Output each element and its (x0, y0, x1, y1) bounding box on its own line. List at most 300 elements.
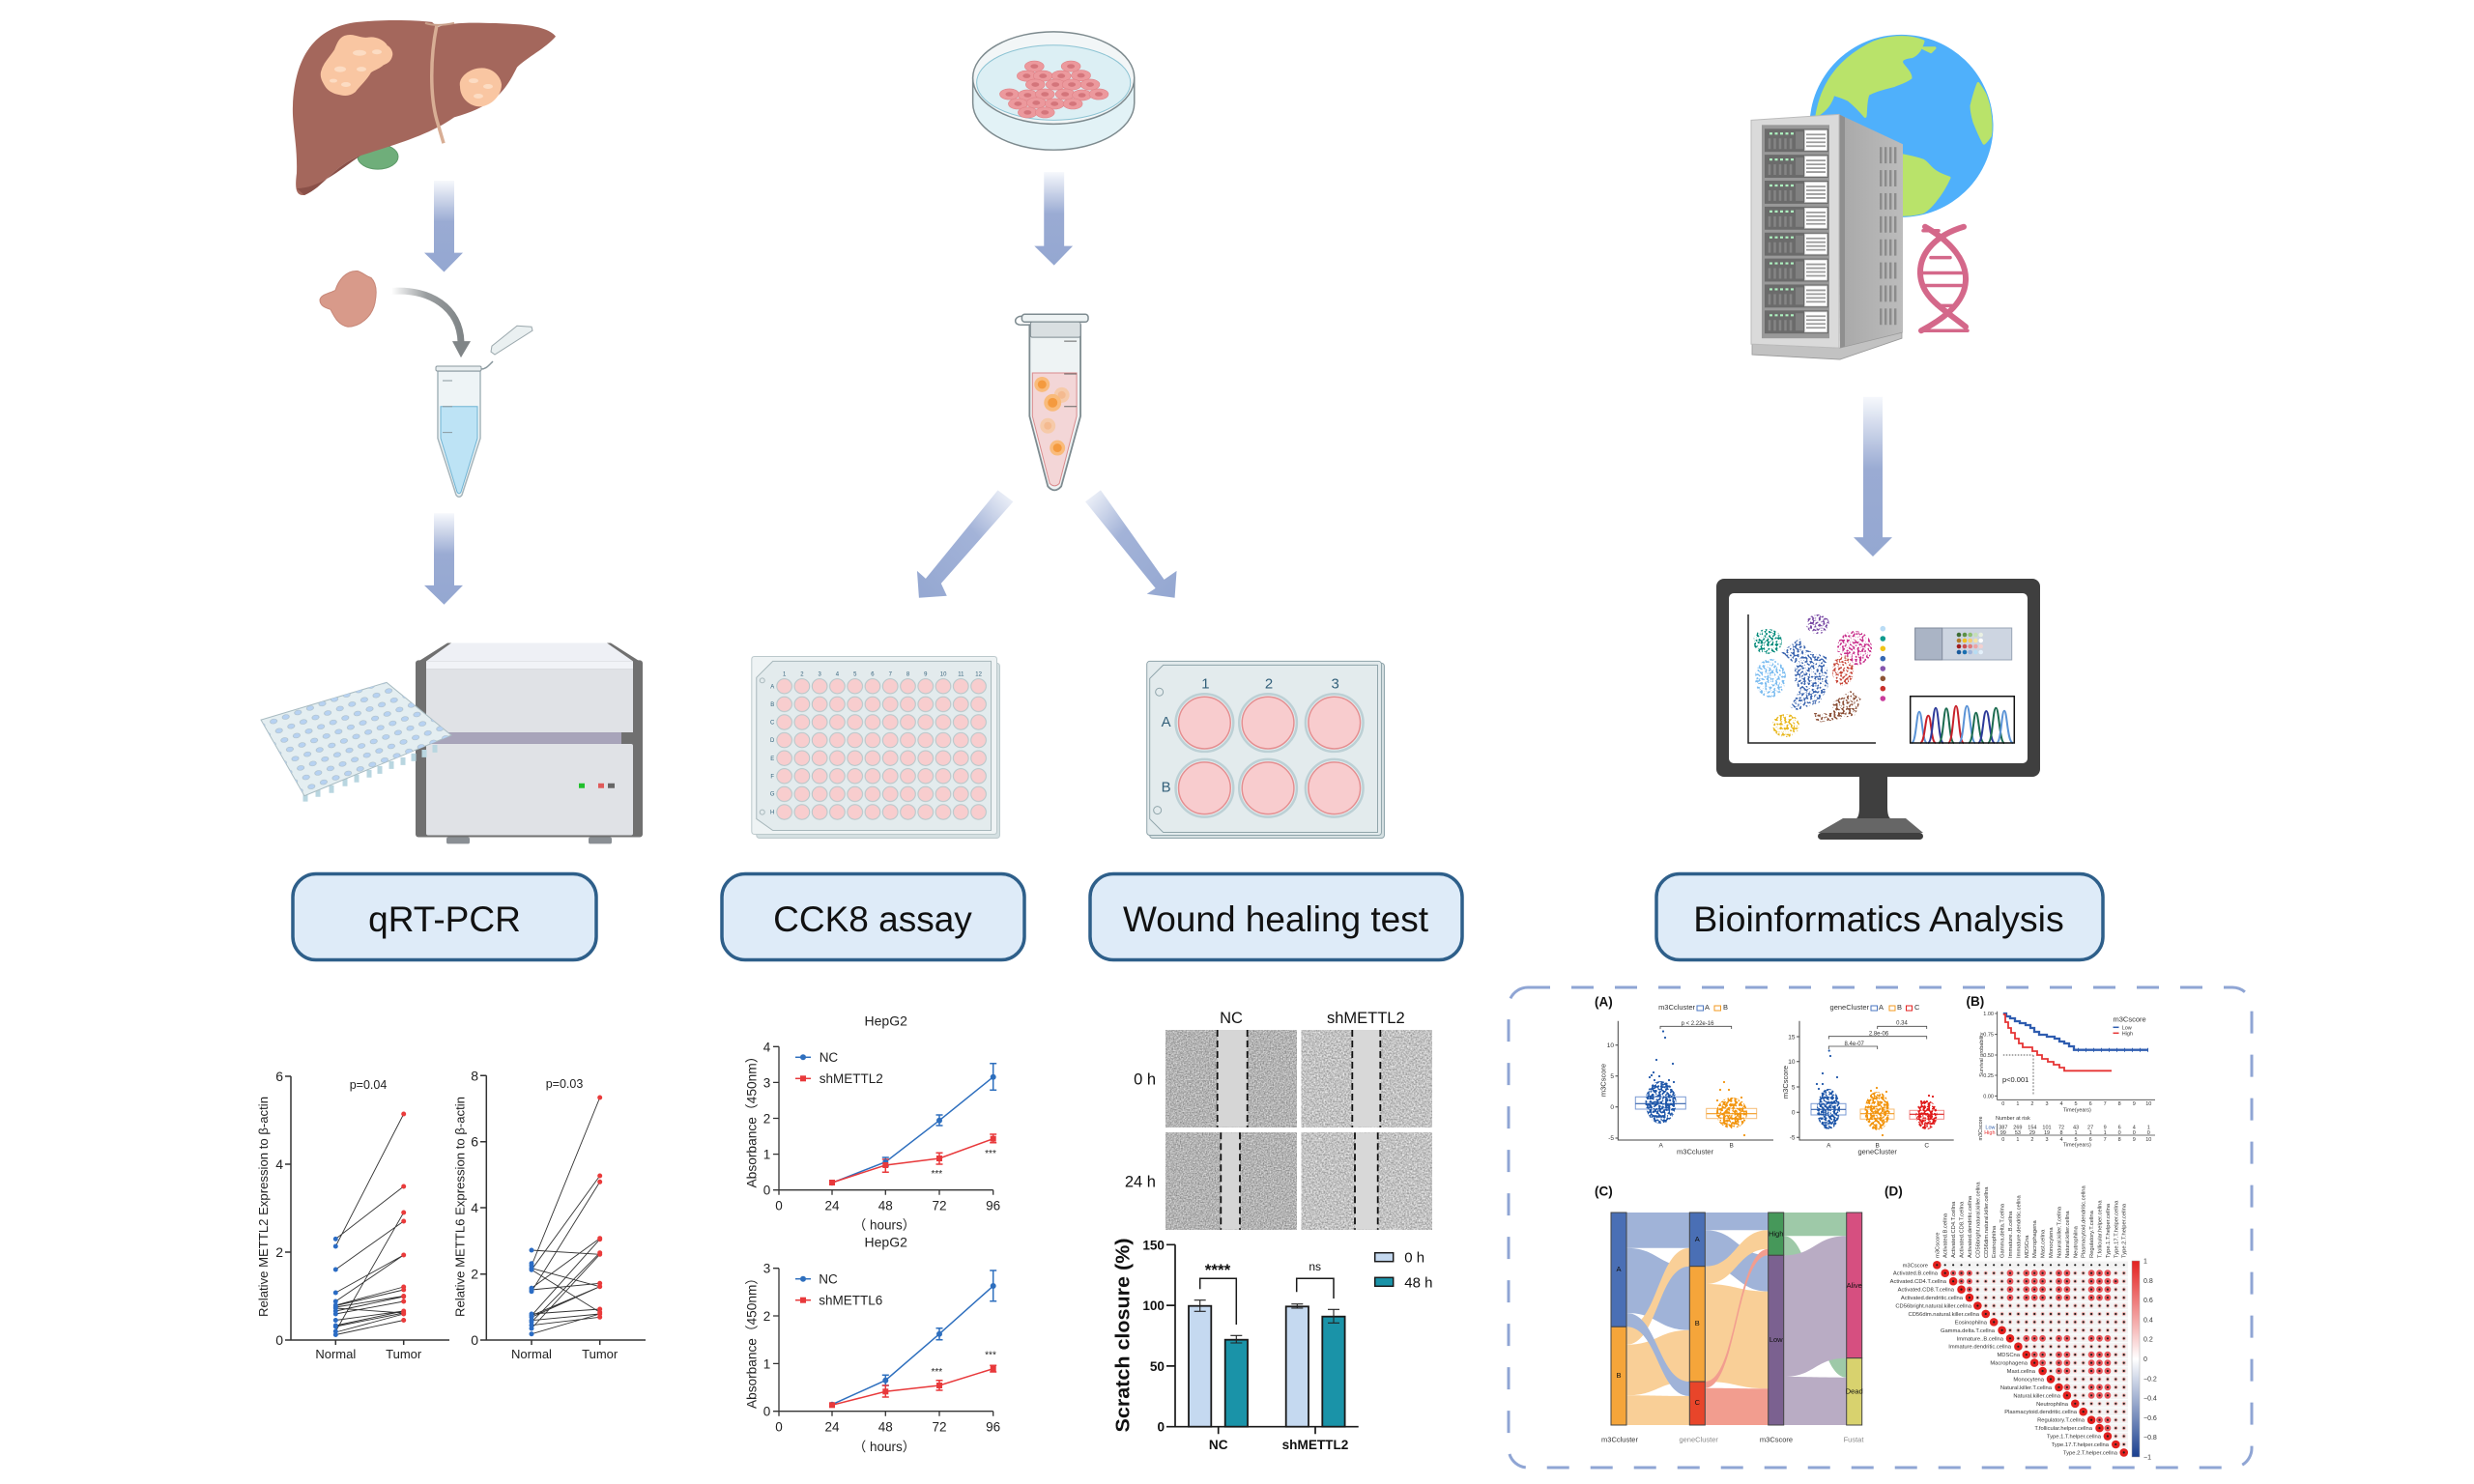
chart: survival curves: 0.00 (1983, 1094, 1994, 1099)
chart: sankey alluvial diagram (1595, 1184, 1864, 1444)
icon: 96-well CCK8 plate: 5 (853, 671, 857, 677)
colour scale legend: 0.2 (2143, 1337, 2153, 1344)
table: number at risk: 29 (2029, 1130, 2035, 1136)
chart: tSNE cluster scatter (1748, 614, 1885, 743)
chart: METTL2 paired expression: Relative METTL2 Expression to β-actin (256, 1097, 271, 1317)
icon: six-well plate: A (1162, 714, 1171, 730)
chart: METTL6 paired expression: 4 (471, 1200, 478, 1215)
chart: survival curves: 0 (2001, 1101, 2004, 1107)
matrix row labels: Monocytena (2013, 1378, 2045, 1384)
table: number at risk: 5 (2074, 1137, 2078, 1143)
matrix row labels: Mast.cellna (2007, 1369, 2036, 1375)
chart: CCK8 shMETTL2 growth curve: NC (820, 1050, 838, 1065)
colour scale legend: −0.4 (2143, 1396, 2157, 1403)
table: number at risk: 9 (2133, 1137, 2136, 1143)
chart: CCK8 shMETTL6 growth curve: 0 (763, 1405, 770, 1419)
chart: scratch closure bars: shMETTL2 (1282, 1438, 1349, 1452)
chart: m3Cscore boxplot by m3Ccluster: (A) (1595, 995, 1613, 1010)
icon: 96-well CCK8 plate (752, 656, 999, 838)
figure: wound healing micrographs: 0 h (1134, 1071, 1156, 1089)
chart: scratch closure bars: 50 (1150, 1359, 1165, 1374)
matrix column labels: Activated.CD4.T.cellna (1951, 1201, 1957, 1258)
chart: CCK8 shMETTL6 growth curve: 0 (775, 1420, 783, 1435)
chart: CCK8 shMETTL6 growth curve: 3 (763, 1262, 770, 1276)
chart: CCK8 shMETTL6 growth curve: HepG2 (865, 1235, 907, 1250)
chart: m3Cscore boxplot by m3Ccluster: A (1659, 1142, 1664, 1149)
chart: m3Cscore boxplot by geneCluster: geneCluster (1830, 1003, 1869, 1012)
matrix column labels: Gamma.delta.T.cellna (2000, 1203, 2006, 1258)
label: qRT-PCR: qRT-PCR (368, 899, 521, 939)
chart: sankey alluvial diagram: geneCluster (1679, 1436, 1718, 1444)
table: number at risk: 1 (2089, 1130, 2092, 1136)
matrix column labels: m3Cscore (1935, 1233, 1941, 1258)
panel: bioinformatics results dashed frame (1509, 987, 2252, 1468)
chart: m3Cscore boxplot by m3Ccluster: m3Ccluster (1658, 1003, 1695, 1012)
chart: CCK8 shMETTL2 growth curve: *** (985, 1149, 996, 1159)
chart: scratch closure bars: NC (1209, 1438, 1228, 1452)
matrix diagonal (1937, 1265, 2124, 1453)
chart: m3Cscore boxplot by m3Ccluster: B (1730, 1142, 1734, 1149)
matrix column labels: CD56bright.natural.killer.cellna (1975, 1182, 1981, 1258)
table: number at risk: 7 (2104, 1137, 2107, 1143)
icon: 96-well CCK8 plate: 7 (889, 671, 893, 677)
chart: immune cell correlation matrix: (D) (1884, 1184, 1903, 1199)
matrix column labels: Regulatory.T.cellna (2089, 1210, 2095, 1258)
chart: sankey alluvial diagram: Alive (1847, 1281, 1862, 1290)
icon: 96-well CCK8 plate: A (770, 684, 774, 690)
table: number at risk: 0 (2147, 1130, 2150, 1136)
table: number at risk: 99 (2000, 1130, 2006, 1136)
chart: survival curves: Low (2122, 1026, 2132, 1032)
arrow: liver to tumour sample (424, 181, 463, 272)
table: number at risk: 1 (2074, 1130, 2078, 1136)
chart: CCK8 shMETTL2 growth curve: shMETTL2 (820, 1071, 883, 1086)
column: database to bioinformatics illustrations (1751, 35, 1996, 556)
table: number at risk: 0 (2118, 1130, 2121, 1136)
chart: m3Cscore boxplot by geneCluster: C (1924, 1142, 1929, 1149)
icon: qPCR machine (416, 643, 643, 843)
matrix column labels: Type.1.T.helper.cellna (2106, 1203, 2112, 1258)
matrix row labels: Plasmacytoid.dendritic.cellna (2004, 1410, 2078, 1415)
icon: globe (1809, 35, 1996, 221)
matrix row labels: Natural.killer.T.cellna (2000, 1385, 2053, 1391)
colour scale legend: 0.6 (2143, 1298, 2153, 1304)
figure: wound healing micrographs: 24 h (1125, 1174, 1156, 1191)
chart: m3Cscore boxplot by geneCluster: 10 (1788, 1059, 1796, 1066)
colour scale legend: −0.2 (2143, 1376, 2157, 1383)
chart: CCK8 shMETTL2 growth curve: 3 (763, 1075, 770, 1090)
matrix row labels: Activated.CD8.T.cellna (1898, 1288, 1955, 1294)
chart: CCK8 shMETTL6 growth curve (745, 1235, 1000, 1454)
chart: sankey alluvial diagram: B (1695, 1319, 1700, 1327)
chart: CCK8 shMETTL2 growth curve: 1 (763, 1148, 770, 1162)
chart: survival curves: 2 (2030, 1101, 2033, 1107)
icon: 96-well CCK8 plate: 10 (940, 671, 947, 677)
chart: m3Cscore boxplot by geneCluster: 0 (1792, 1109, 1796, 1117)
table: number at risk: Number at risk (1996, 1116, 2030, 1122)
chart: survival curves: 7 (2104, 1101, 2107, 1107)
table: number at risk: 8 (2118, 1137, 2121, 1143)
matrix column labels: Natural.killer.cellna (2065, 1211, 2071, 1258)
arrow: dish to tube (1034, 172, 1073, 266)
table: number at risk: 154 (2028, 1125, 2036, 1130)
chart: METTL6 paired expression (453, 1068, 646, 1361)
chart: sankey alluvial diagram: m3Ccluster (1601, 1436, 1638, 1444)
icon: six-well plate: 3 (1332, 675, 1339, 692)
arrow: tissue into tube (391, 291, 471, 357)
table: number at risk: 6 (2089, 1137, 2092, 1143)
matrix column labels (1935, 1182, 2128, 1258)
chart: CCK8 shMETTL2 growth curve: 96 (986, 1199, 1000, 1213)
chart: survival curves: 4 (2059, 1101, 2063, 1107)
chart: survival curves: 3 (2045, 1101, 2049, 1107)
matrix column labels: Activated.dendritic.cellna (1968, 1195, 1973, 1258)
chart: survival curves: m3Cscore (2113, 1015, 2146, 1024)
chart: METTL2 paired expression: 0 (275, 1332, 283, 1348)
chart: sankey alluvial diagram: (C) (1595, 1184, 1613, 1199)
matrix row labels: Neutrophilna (2036, 1402, 2069, 1408)
icon: 96-well CCK8 plate: E (770, 756, 774, 762)
chart: m3Cscore boxplot by m3Ccluster (1595, 995, 1773, 1156)
chart: survival curves: Survival probability (1979, 1032, 1985, 1077)
chart: METTL6 paired expression: Tumor (582, 1347, 618, 1361)
chart: CCK8 shMETTL2 growth curve: 0 (775, 1199, 783, 1213)
label: Wound healing test: Wound healing test (1123, 899, 1429, 939)
matrix column labels: Immature..B.cellna (2008, 1211, 2014, 1258)
icon: tumour tissue piece (320, 271, 376, 327)
chart: m3Cscore boxplot by geneCluster: A (1827, 1142, 1831, 1149)
chart: m3Cscore boxplot by geneCluster (1781, 1003, 1954, 1156)
chart: survival curves: 5 (2074, 1101, 2078, 1107)
matrix column labels: Activated.B.cellna (1943, 1213, 1949, 1258)
matrix row labels: Regulatory.T.cellna (2037, 1418, 2086, 1424)
chart: METTL6 paired expression: Normal (511, 1347, 552, 1361)
icon: server rack (1751, 114, 1903, 359)
icon: 96-well CCK8 plate: G (770, 792, 775, 798)
chart: survival curves: High (2122, 1032, 2133, 1038)
chart: survival curves: (B) (1966, 994, 1984, 1009)
matrix strong correlation dots (2010, 1273, 2116, 1428)
chart: m3Cscore boxplot by geneCluster: geneCluster (1857, 1147, 1897, 1156)
arrow: database to analysis (1854, 397, 1892, 556)
label: CCK8 assay: CCK8 assay (773, 899, 972, 939)
table: number at risk: Time(years) (2063, 1143, 2091, 1149)
icon: computer monitor with single-cell plots (1716, 579, 2040, 840)
matrix row labels: Eosinophilna (1955, 1320, 1988, 1326)
chart: m3Cscore boxplot by m3Ccluster: m3Ccluster (1677, 1147, 1713, 1156)
chart: CCK8 shMETTL2 growth curve: 2 (763, 1111, 770, 1127)
colour scale legend: 0.4 (2143, 1317, 2153, 1324)
chart: METTL6 paired expression: 0 (471, 1332, 478, 1348)
matrix row labels: m3Cscore (1903, 1263, 1928, 1269)
chart: METTL2 paired expression: 4 (275, 1156, 283, 1172)
chart: CCK8 shMETTL2 growth curve: （ hours） (853, 1218, 915, 1233)
chart: sankey alluvial diagram: m3Cscore (1760, 1436, 1793, 1444)
table: number at risk: 387 (1999, 1125, 2007, 1130)
matrix column labels: MDSCna (2025, 1235, 2030, 1258)
table: number at risk: 4 (2059, 1137, 2063, 1143)
colour scale legend: 1 (2143, 1258, 2147, 1266)
chart: METTL2 paired expression (256, 1069, 449, 1361)
chart: survival curves: p<0.001 (2002, 1075, 2028, 1084)
chart: CCK8 shMETTL2 growth curve: 48 (878, 1199, 893, 1213)
chart: METTL2 paired expression: 6 (275, 1069, 283, 1084)
chart: m3Cscore boxplot by geneCluster: C (1914, 1003, 1920, 1012)
icon: 96-well CCK8 plate: 11 (958, 671, 964, 677)
table: number at risk: High (1984, 1130, 1995, 1136)
chart: sankey alluvial diagram: High (1769, 1229, 1783, 1239)
chart: scratch closure bars: 150 (1142, 1238, 1165, 1252)
matrix row labels (1890, 1263, 2118, 1456)
chart: METTL6 paired expression: 8 (471, 1068, 478, 1083)
chart: CCK8 shMETTL6 growth curve: NC (819, 1271, 838, 1286)
arrow: tube to PCR (424, 513, 463, 605)
table: number at risk: 1 (2104, 1130, 2107, 1136)
matrix row labels: CD56dim.natural.killer.cellna (1909, 1312, 1980, 1318)
chart: m3Cscore boxplot by m3Ccluster: m3Cscore (1599, 1064, 1608, 1097)
chart: sankey alluvial diagram: A (1616, 1265, 1622, 1273)
chart: survival curves: Time(years) (2063, 1108, 2091, 1114)
icon: DNA helix (1920, 227, 1968, 330)
icon: 96-well CCK8 plate: C (770, 721, 775, 727)
matrix column labels: Monocytena (2049, 1227, 2055, 1258)
icon: liver with tumours (293, 20, 556, 195)
table: number at risk: 53 (2015, 1130, 2021, 1136)
table: number at risk: 0 (2001, 1137, 2004, 1143)
chart: sankey alluvial diagram: Low (1769, 1335, 1783, 1344)
chart: CCK8 shMETTL2 growth curve: 24 (824, 1199, 840, 1213)
matrix cell background (1933, 1265, 2128, 1452)
matrix column labels: T.follicular.helper.cellna (2097, 1200, 2103, 1258)
chart: m3Cscore boxplot by m3Ccluster: B (1723, 1003, 1728, 1012)
chart: m3Cscore boxplot by geneCluster: 5 (1792, 1084, 1796, 1092)
matrix column labels: Type.2.T.helper.cellna (2122, 1203, 2128, 1258)
chart: CCK8 shMETTL6 growth curve: 96 (986, 1420, 1000, 1435)
table: number at risk: 1 (2147, 1125, 2150, 1130)
icon: 96-well CCK8 plate: 4 (836, 671, 840, 677)
matrix row labels: Activated.B.cellna (1893, 1271, 1939, 1277)
chart: immune cell correlation matrix (1884, 1182, 2157, 1461)
icon: 96-well CCK8 plate: H (770, 811, 774, 816)
matrix column labels: Neutrophilna (2073, 1225, 2079, 1258)
matrix row labels: Immature.dendritic.cellna (1948, 1345, 2012, 1351)
icon: six-well plate: B (1162, 780, 1171, 796)
chart: CCK8 shMETTL2 growth curve: *** (931, 1169, 942, 1180)
colour scale legend: 0.8 (2143, 1278, 2153, 1285)
chart: survival curves: 9 (2133, 1101, 2136, 1107)
chart: sankey alluvial diagram: Dead (1846, 1387, 1863, 1395)
icon: microtube with cell suspension (1016, 314, 1088, 490)
label: CCK8 assay (722, 873, 1024, 960)
chart: survival curves: 0.75 (1983, 1033, 1994, 1039)
table: number at risk: 8 (2059, 1130, 2063, 1136)
icon: 96-well CCK8 plate: D (770, 738, 775, 744)
column: cell culture to assays illustrations (752, 32, 1384, 838)
matrix column labels: Activated.CD8.T.cellna (1960, 1201, 1966, 1258)
label: Bioinformatics Analysis (1656, 873, 2103, 960)
chart: m3Cscore boxplot by geneCluster: B (1876, 1142, 1880, 1149)
chart: survival curves: 10 (2145, 1101, 2151, 1107)
chart: sankey alluvial diagram: B (1616, 1371, 1622, 1380)
chart: m3Cscore boxplot by geneCluster: 2.8e-06 (1869, 1031, 1889, 1037)
icon: six-well plate (1147, 661, 1384, 838)
chart: survival curves: 1.00 (1983, 1012, 1994, 1017)
label: Wound healing test (1090, 873, 1462, 960)
table: number at risk: 43 (2073, 1125, 2079, 1130)
matrix row labels: T.follicular.helper.cellna (2034, 1426, 2093, 1432)
chart: CCK8 shMETTL6 growth curve: *** (931, 1367, 942, 1378)
matrix row labels: Macrophagena (1990, 1361, 2028, 1367)
matrix row labels: Activated.CD4.T.cellna (1890, 1279, 1947, 1285)
colour scale legend: −1 (2143, 1455, 2151, 1461)
chart: m3Cscore boxplot by geneCluster: -5 (1790, 1134, 1796, 1142)
chart: scratch closure bars: 0 h (1404, 1250, 1424, 1267)
icon: PCR 96-well plate (261, 682, 451, 802)
table: number at risk: 3 (2045, 1137, 2049, 1143)
icon: 96-well CCK8 plate: F (770, 774, 774, 780)
chart: METTL2 paired expression: p=0.04 (350, 1078, 387, 1092)
arrow: tube to six-well plate (1085, 490, 1177, 598)
colour scale legend: −0.8 (2143, 1435, 2157, 1441)
icon: 96-well CCK8 plate: 2 (800, 671, 804, 677)
chart: sankey alluvial diagram: C (1695, 1398, 1701, 1407)
chart: CCK8 shMETTL2 growth curve: 4 (763, 1040, 771, 1054)
icon: microtube with blue liquid (436, 326, 532, 497)
chart: CCK8 shMETTL6 growth curve: 24 (824, 1420, 840, 1435)
chart: m3Cscore boxplot by m3Ccluster: 5 (1610, 1073, 1614, 1080)
icon: 96-well CCK8 plate: 1 (783, 671, 787, 677)
matrix row labels: Type.2.T.helper.cellna (2063, 1450, 2118, 1456)
table: number at risk: 9 (2104, 1125, 2107, 1130)
chart: METTL6 paired expression: 2 (471, 1267, 478, 1282)
chart: m3Cscore boxplot by m3Ccluster: p < 2.22e-16 (1682, 1021, 1714, 1027)
chart: survival curves: 0.50 (1983, 1053, 1994, 1059)
figure: wound healing micrographs (1125, 1010, 1432, 1230)
icon: 96-well CCK8 plate: 6 (871, 671, 875, 677)
matrix significance marks (1937, 1265, 2124, 1452)
table: number at risk: 2 (2030, 1137, 2033, 1143)
chart: m3Cscore boxplot by geneCluster: 8.4e-07 (1845, 1042, 1865, 1047)
matrix column labels: Macrophagena (2032, 1220, 2038, 1258)
chart: CCK8 shMETTL6 growth curve: *** (985, 1351, 996, 1360)
chart: METTL2 paired expression: 2 (275, 1244, 283, 1260)
table: number at risk: 72 (2058, 1125, 2064, 1130)
colour scale legend: 0 (2143, 1356, 2147, 1363)
figure: wound healing micrographs: NC (1220, 1010, 1243, 1027)
chart: scratch closure bars: 100 (1142, 1298, 1165, 1313)
chart: scratch closure bars (1111, 1238, 1433, 1452)
chart: METTL6 paired expression: p=0.03 (546, 1077, 583, 1091)
matrix row labels: Immature..B.cellna (1957, 1336, 2004, 1342)
icon: 96-well CCK8 plate: 9 (924, 671, 928, 677)
matrix row labels: Type.17.T.helper.cellna (2052, 1442, 2110, 1448)
chart: CCK8 shMETTL2 growth curve: 0 (763, 1184, 770, 1198)
chart: sequencing chromatogram (1911, 697, 2014, 743)
chart: CCK8 shMETTL2 growth curve: 72 (932, 1199, 947, 1213)
chart: CCK8 shMETTL6 growth curve: 48 (878, 1420, 893, 1435)
table: number at risk: 101 (2042, 1125, 2052, 1130)
chart: survival curves: 6 (2089, 1101, 2092, 1107)
matrix column labels: Eosinophilna (1992, 1225, 1998, 1258)
matrix column labels: Immature.dendritic.cellna (2016, 1194, 2022, 1258)
chart: scratch closure bars: ns (1309, 1260, 1321, 1273)
chart: CCK8 shMETTL2 growth curve: HepG2 (865, 1013, 907, 1029)
table: number at risk: 269 (2013, 1125, 2022, 1130)
chart: survival curves: 1 (2016, 1101, 2019, 1107)
icon: 96-well CCK8 plate: 3 (818, 671, 821, 677)
chart: scratch closure bars: Scratch closure (%) (1111, 1239, 1134, 1432)
matrix row labels: Activated.dendritic.cellna (1901, 1296, 1964, 1301)
chart: survival curves: 0.25 (1983, 1073, 1994, 1079)
chart: m3Cscore boxplot by m3Ccluster: 10 (1607, 1042, 1614, 1049)
chart: METTL2 paired expression: Tumor (386, 1347, 422, 1361)
chart: METTL6 paired expression: 6 (471, 1134, 478, 1150)
chart: CCK8 shMETTL2 growth curve: Absorbance（450nm） (745, 1049, 760, 1188)
matrix row labels: CD56bright.natural.killer.cellna (1895, 1304, 1972, 1310)
chart: m3Cscore boxplot by m3Ccluster: A (1705, 1003, 1710, 1012)
icon: 96-well CCK8 plate: 12 (975, 671, 983, 677)
matrix column labels: Natural.killer.T.cellna (2057, 1206, 2062, 1258)
chart: CCK8 shMETTL6 growth curve: （ hours） (853, 1440, 915, 1454)
chart: m3Cscore boxplot by geneCluster: 0.34 (1896, 1021, 1908, 1027)
matrix row labels: Gamma.delta.T.cellna (1941, 1328, 1996, 1334)
label: Bioinformatics Analysis: Bioinformatics Analysis (1693, 899, 2064, 939)
table: number at risk: 10 (2145, 1137, 2151, 1143)
table: number at risk: Low (1985, 1125, 1996, 1130)
colour scale legend (2132, 1258, 2157, 1461)
chart: m3Cscore boxplot by geneCluster: 15 (1788, 1034, 1796, 1042)
chart: CCK8 shMETTL6 growth curve: shMETTL6 (819, 1293, 882, 1307)
matrix column labels: Type.17.T.helper.cellna (2114, 1200, 2119, 1258)
chart: m3Cscore boxplot by geneCluster: A (1879, 1003, 1884, 1012)
column: tissue to qRT-PCR illustrations (261, 20, 643, 843)
chart: CCK8 shMETTL6 growth curve: 72 (932, 1420, 947, 1435)
label: qRT-PCR (293, 873, 596, 960)
matrix column labels: CD56dim.natural.killer.cellna (1984, 1186, 1990, 1258)
chart: scratch closure bars: **** (1205, 1261, 1231, 1279)
matrix column labels: Mast.cellna (2041, 1229, 2047, 1258)
chart: CCK8 shMETTL6 growth curve: Absorbance（450nm） (745, 1271, 760, 1409)
chart: sankey alluvial diagram: Fustat (1844, 1436, 1864, 1444)
icon: petri dish with cells (973, 32, 1135, 150)
chart: m3Cscore boxplot by m3Ccluster: 0 (1610, 1104, 1614, 1111)
icon: 96-well CCK8 plate: 8 (906, 671, 910, 677)
arrow: tube to CCK8 plate (917, 490, 1013, 598)
colour scale legend: −0.6 (2143, 1415, 2157, 1422)
table: number at risk: 0 (2133, 1130, 2136, 1136)
icon: 96-well CCK8 plate: B (770, 702, 774, 708)
chart: m3Cscore boxplot by m3Ccluster: -5 (1608, 1135, 1614, 1142)
icon: six-well plate: 1 (1201, 675, 1210, 692)
chart: survival curves (1966, 994, 2155, 1114)
table: number at risk: 6 (2118, 1125, 2121, 1130)
icon: microarray slide (1915, 628, 2012, 660)
table: number at risk (1978, 1116, 2155, 1149)
table: number at risk: 27 (2087, 1125, 2093, 1130)
chart: scratch closure bars: 48 h (1404, 1274, 1433, 1291)
matrix row labels: Type.1.T.helper.cellna (2047, 1434, 2102, 1440)
chart: METTL2 paired expression: Normal (315, 1347, 356, 1361)
table: number at risk: 4 (2133, 1125, 2136, 1130)
table: number at risk: m3Cscore (1978, 1116, 1984, 1141)
chart: CCK8 shMETTL2 growth curve (745, 1013, 1000, 1233)
chart: m3Cscore boxplot by geneCluster: B (1897, 1003, 1902, 1012)
chart: scratch closure bars: 0 (1157, 1420, 1165, 1435)
matrix weak correlation dots (1945, 1273, 2124, 1444)
matrix row labels: MDSCna (1997, 1353, 2021, 1358)
table: number at risk: 19 (2044, 1130, 2050, 1136)
table: number at risk: 1 (2016, 1137, 2019, 1143)
